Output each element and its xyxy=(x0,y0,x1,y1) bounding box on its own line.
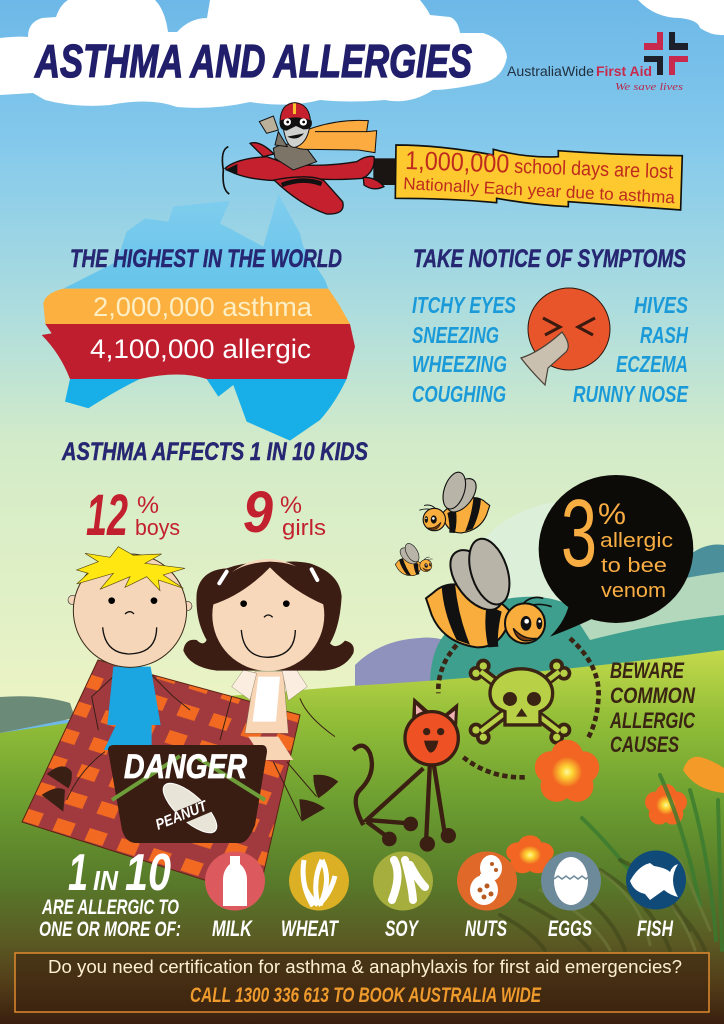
stat: 1 in 10: 1 xyxy=(68,844,88,902)
bubble text: 3% allergic to bee venom: allergic xyxy=(600,530,673,552)
flower: large xyxy=(535,740,599,802)
text: beware common allergic causes: CAUSES xyxy=(610,732,679,757)
symptoms right column xyxy=(573,292,689,407)
map south region xyxy=(65,379,347,441)
grass field xyxy=(0,650,724,1024)
text: beware common allergic causes xyxy=(609,658,696,757)
banner tow connector xyxy=(373,158,397,185)
plane wings xyxy=(250,143,384,214)
food labels: WHEAT xyxy=(281,916,339,941)
stat: 1 in 10: 10 xyxy=(125,844,171,902)
bubble text: 3% allergic to bee venom: venom xyxy=(601,580,666,602)
symptoms left column: COUGHING xyxy=(412,381,506,407)
icon: milk xyxy=(205,852,265,910)
icon: soy xyxy=(373,852,433,910)
bee large xyxy=(426,534,552,647)
map orange band xyxy=(43,289,350,324)
speech bubble xyxy=(539,475,693,637)
logo: Australia Wide First Aid: AustraliaWide xyxy=(507,63,594,79)
icon: fish xyxy=(626,850,686,910)
distant hills and trees xyxy=(0,502,724,733)
dashed connectors xyxy=(438,638,599,777)
stat: 1 in 10: ONE OR MORE OF: xyxy=(39,918,181,941)
food labels: SOY xyxy=(385,916,420,941)
icon: sneezing face xyxy=(521,288,610,385)
food labels xyxy=(212,916,674,941)
heading: asthma affects 1 in 10 kids: ASTHMA AFFECTS 1 IN 10 KIDS xyxy=(61,438,368,466)
stat: allergic count: 4,100,000 allergic xyxy=(90,334,311,364)
basket: danger peanut: DANGER xyxy=(124,748,247,786)
stat: 1 in 10: IN xyxy=(93,865,119,896)
text: beware common allergic causes: COMMON xyxy=(610,683,696,708)
symptoms left column: SNEEZING xyxy=(412,322,499,348)
food labels: MILK xyxy=(212,916,254,941)
stat: 12% boys: boys xyxy=(135,515,180,540)
grass tufts xyxy=(500,775,722,950)
symptoms right column: RASH xyxy=(640,322,688,348)
stat: asthma count: 2,000,000 asthma xyxy=(93,292,313,322)
title: ASTHMA AND ALLERGIES xyxy=(34,35,472,87)
bubble text: 3% allergic to bee venom xyxy=(561,480,673,602)
sky background xyxy=(0,0,724,720)
icon: wheat xyxy=(289,852,349,910)
stat: 1 in 10 xyxy=(39,844,181,941)
logo: Australia Wide First Aid: We save lives xyxy=(615,81,683,93)
text: beware common allergic causes: ALLERGIC xyxy=(609,708,696,733)
food labels: NUTS xyxy=(465,916,507,941)
bubble text: 3% allergic to bee venom: % xyxy=(598,498,626,531)
stat: 9% girls xyxy=(243,480,326,545)
tulip xyxy=(683,757,724,793)
kids illustration xyxy=(42,547,354,822)
clouds xyxy=(0,0,724,108)
symptoms left column: ITCHY EYES xyxy=(412,292,516,318)
propeller xyxy=(222,147,229,194)
symptoms right column: HIVES xyxy=(634,292,689,318)
peanut icon: PEANUT xyxy=(153,797,211,834)
food labels: FISH xyxy=(637,916,674,941)
picnic blanket xyxy=(22,660,300,897)
pilot xyxy=(259,103,377,170)
banner xyxy=(395,145,682,210)
map red band xyxy=(42,324,355,379)
bees, speech bubble and causes xyxy=(353,469,693,852)
flower: foreground xyxy=(506,835,554,873)
stat: 9% girls: 9 xyxy=(243,480,273,545)
peanut icon xyxy=(153,776,224,840)
bubble text: 3% allergic to bee venom: to bee xyxy=(601,555,667,577)
symptoms left column: WHEEZING xyxy=(412,351,507,377)
call to action box xyxy=(15,953,709,1012)
bee small xyxy=(391,538,435,579)
basket: danger peanut xyxy=(108,745,267,843)
bubble text: 3% allergic to bee venom: 3 xyxy=(561,480,597,587)
text: beware common allergic causes: BEWARE xyxy=(610,658,685,683)
logo: Australia Wide First Aid: First Aid xyxy=(596,63,652,79)
logo cross xyxy=(644,32,688,75)
boy xyxy=(42,547,192,812)
banner text line 2: Nationally Each year due to asthma xyxy=(403,174,676,207)
symptoms right column: RUNNY NOSE xyxy=(573,381,688,407)
skull and crossbones xyxy=(469,659,571,745)
stat: 12% boys xyxy=(86,483,180,548)
call to action box: Do you need certification for asthma & anaphylaxis for first aid emergencies? xyxy=(48,957,682,977)
cat xyxy=(353,697,458,852)
stat: 1 in 10: ARE ALLERGIC TO xyxy=(41,896,179,919)
stat: 9% girls: girls xyxy=(282,515,326,540)
food labels: EGGS xyxy=(548,916,592,941)
symptoms left column xyxy=(412,292,516,407)
heading: highest in the world: THE HIGHEST IN THE WORLD xyxy=(70,245,342,273)
flower: small xyxy=(645,784,687,824)
stat: 9% girls: % xyxy=(280,492,302,519)
plane body xyxy=(225,156,374,181)
icon: eggs xyxy=(541,852,601,910)
map north region xyxy=(63,194,328,289)
stat: 12% boys: % xyxy=(137,492,159,519)
call to action box: CALL 1300 336 613 TO BOOK AUSTRALIA WIDE xyxy=(190,984,542,1007)
map of Australia xyxy=(42,194,355,441)
plane and banner xyxy=(222,103,682,214)
bee medium xyxy=(419,469,490,533)
logo: Australia Wide First Aid xyxy=(507,32,688,93)
girl xyxy=(183,559,354,822)
icon: nuts xyxy=(457,852,517,910)
stat: 12% boys: 12 xyxy=(86,483,128,548)
symptoms right column: ECZEMA xyxy=(616,351,688,377)
banner text line 1: 1,000,000 school days are lost xyxy=(405,145,674,184)
